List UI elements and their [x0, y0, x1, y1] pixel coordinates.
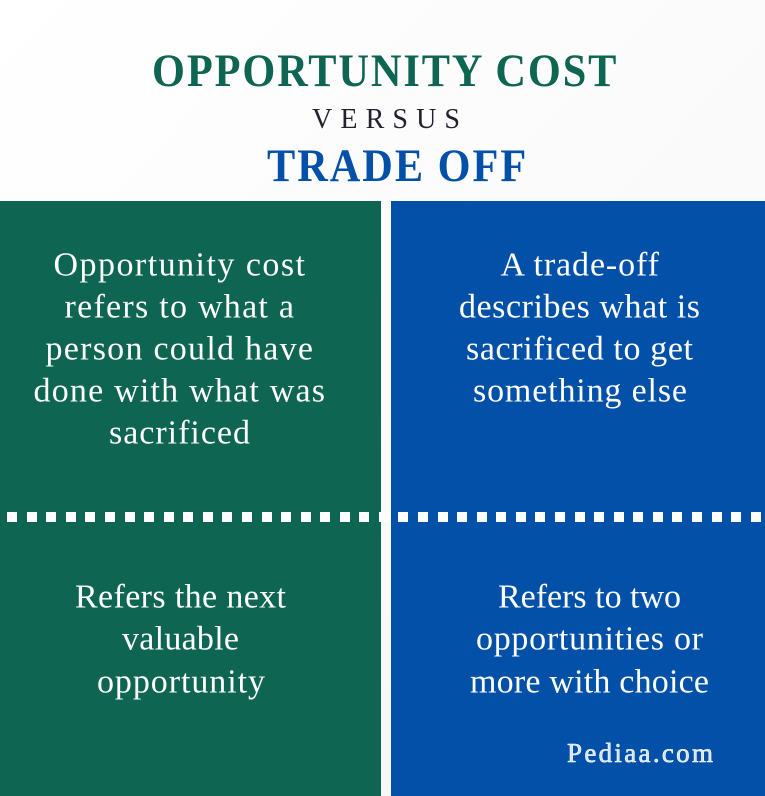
text block: opportunity cost definition — [34, 246, 325, 452]
title: opportunity cost: OPPORTUNITY COST — [152, 44, 617, 97]
text block: opportunity cost scope — [75, 578, 287, 700]
text block: trade-off scope — [470, 578, 709, 700]
text block: trade-off scope: opportunities or — [476, 620, 704, 658]
text block: trade-off definition: something else — [473, 372, 687, 410]
text block: trade-off definition: describes what is — [459, 288, 700, 326]
text block: trade-off definition: A trade-off — [500, 246, 660, 284]
text block: trade-off definition — [459, 246, 700, 410]
text block: opportunity cost definition: done with what was — [34, 372, 325, 410]
text block: opportunity cost definition: sacrificed — [109, 414, 250, 452]
text block: opportunity cost scope: Refers the next — [75, 578, 287, 616]
title: trade off: TRADE OFF — [267, 139, 526, 192]
text block: trade-off scope: more with choice — [470, 664, 709, 700]
text block: opportunity cost definition: person could have — [46, 330, 313, 368]
subtitle: versus: VERSUS — [312, 104, 460, 135]
logo: pediaa.com: Pediaa.com — [567, 738, 713, 768]
panel: opportunity cost — [0, 201, 381, 796]
text block: trade-off scope: Refers to two — [498, 578, 681, 616]
text block: trade-off definition: sacrificed to get — [466, 330, 694, 368]
panel: trade off — [391, 201, 765, 796]
text block: opportunity cost scope: opportunity — [97, 664, 265, 700]
header — [152, 44, 617, 192]
text block: opportunity cost scope: valuable — [122, 620, 239, 658]
text block: opportunity cost definition: refers to what a — [64, 288, 294, 326]
text block: opportunity cost definition: Opportunity cost — [54, 246, 306, 284]
